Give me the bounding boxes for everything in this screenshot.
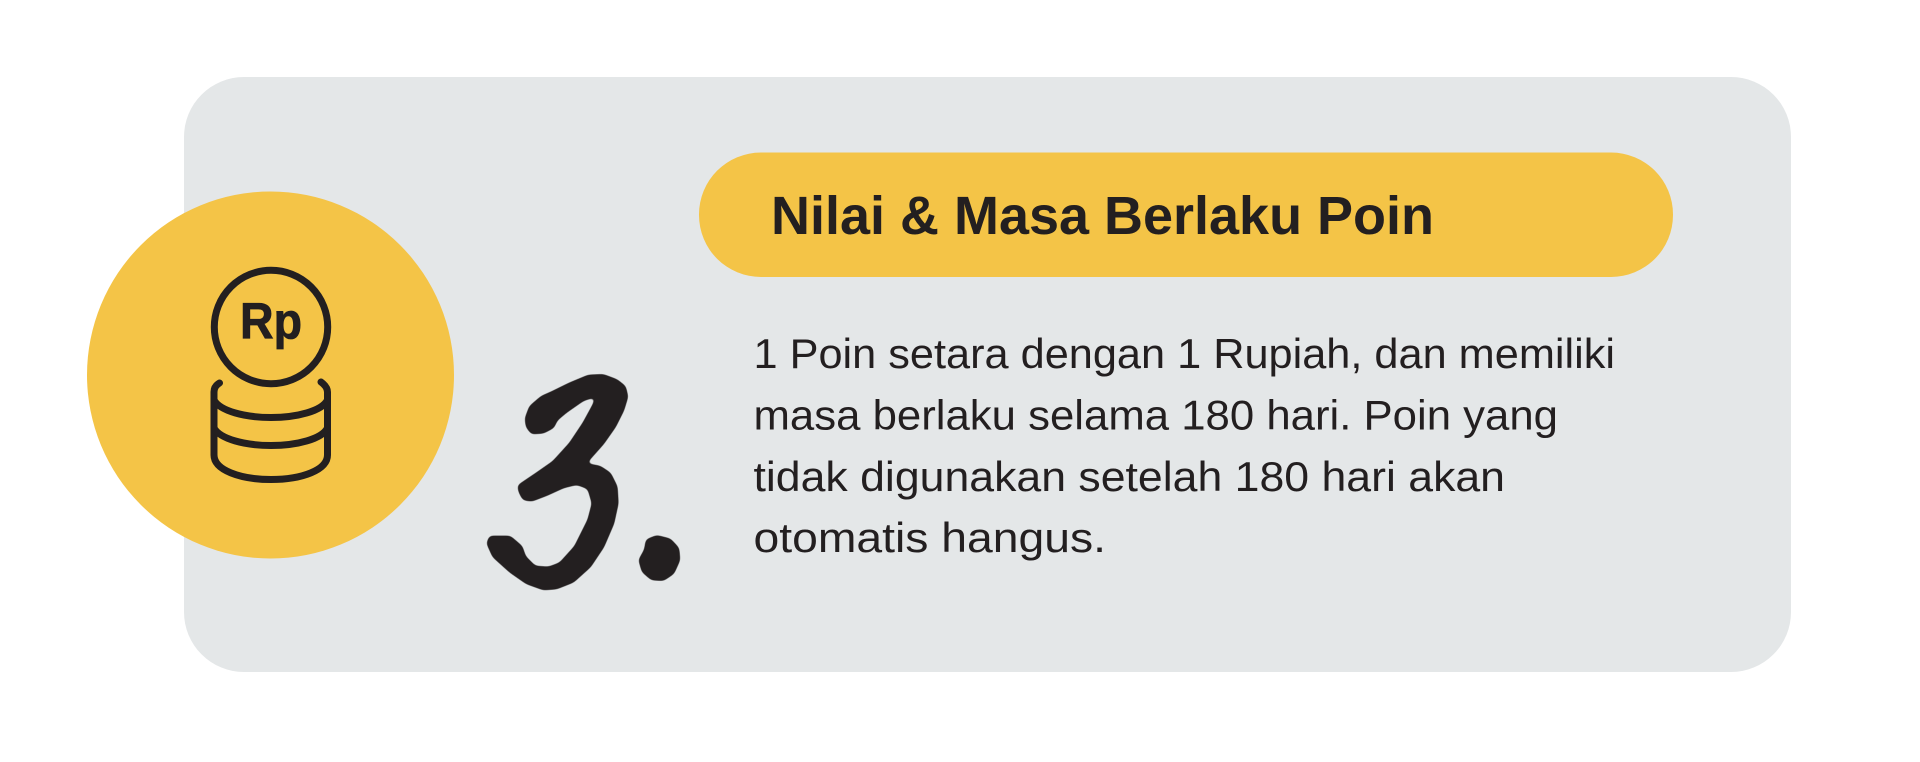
body text: tidak digunakan setelah 180 hari akan [754, 453, 1505, 500]
body text: 1 Poin setara dengan 1 Rupiah, dan memiliki [754, 330, 1615, 377]
panel: grey background card [184, 77, 1791, 672]
icon: coin [214, 270, 328, 384]
body text [754, 330, 1615, 561]
heading pill [699, 152, 1673, 277]
coin label: Rp [240, 292, 302, 350]
body text: otomatis hangus. [754, 514, 1106, 561]
icon: coin stack [214, 382, 328, 480]
body text: masa berlaku selama 180 hari. Poin yang [754, 392, 1558, 438]
icon: yellow circle with rupiah coins [87, 192, 454, 558]
step number: hand-drawn 3. [487, 375, 679, 589]
heading text: Nilai & Masa Berlaku Poin [771, 186, 1434, 246]
